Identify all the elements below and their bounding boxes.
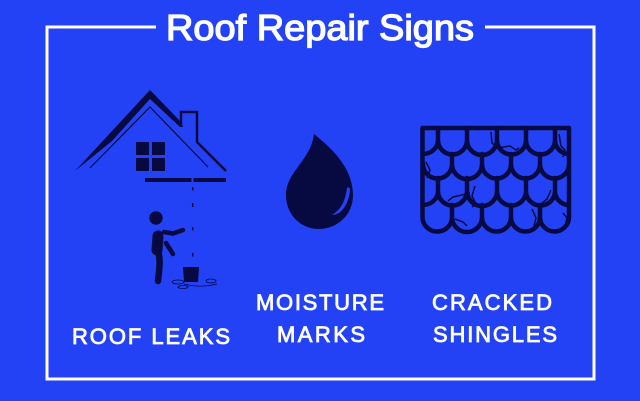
label: moisture marks: MOISTURE bbox=[256, 290, 384, 315]
person bbox=[149, 211, 183, 281]
label: roof leaks: ROOF LEAKS bbox=[72, 324, 230, 349]
chimney and right roof bbox=[181, 112, 226, 171]
white frame bbox=[47, 27, 594, 379]
shingle row 3 bbox=[423, 178, 569, 206]
icon: house with leaking roof bbox=[75, 90, 226, 288]
ceiling beam bbox=[145, 178, 226, 182]
bucket bbox=[183, 267, 199, 282]
panel: moisture marks: MARKS bbox=[277, 322, 365, 347]
shingle top bar and sides bbox=[422, 128, 569, 232]
panel: roof leaks bbox=[72, 90, 230, 349]
falling drips bbox=[192, 187, 194, 256]
water puddle bbox=[172, 279, 217, 288]
roof wedge bbox=[75, 90, 183, 171]
label: cracked shingles: CRACKED bbox=[432, 290, 552, 315]
panel: moisture marks bbox=[256, 134, 384, 347]
shingle row 1 bbox=[423, 128, 569, 155]
shingle row 2 bbox=[423, 154, 569, 179]
cracks bbox=[426, 132, 567, 226]
shingle row 4 bbox=[438, 205, 555, 232]
window bbox=[136, 142, 165, 171]
icon: water drop bbox=[286, 134, 353, 229]
title: Roof Repair Signs bbox=[166, 7, 474, 48]
icon: cracked shingles bbox=[422, 128, 569, 232]
inner roof line bbox=[90, 107, 208, 168]
infographic canvas: SHINGLES bbox=[433, 322, 557, 347]
panel: cracked shingles bbox=[422, 128, 569, 232]
